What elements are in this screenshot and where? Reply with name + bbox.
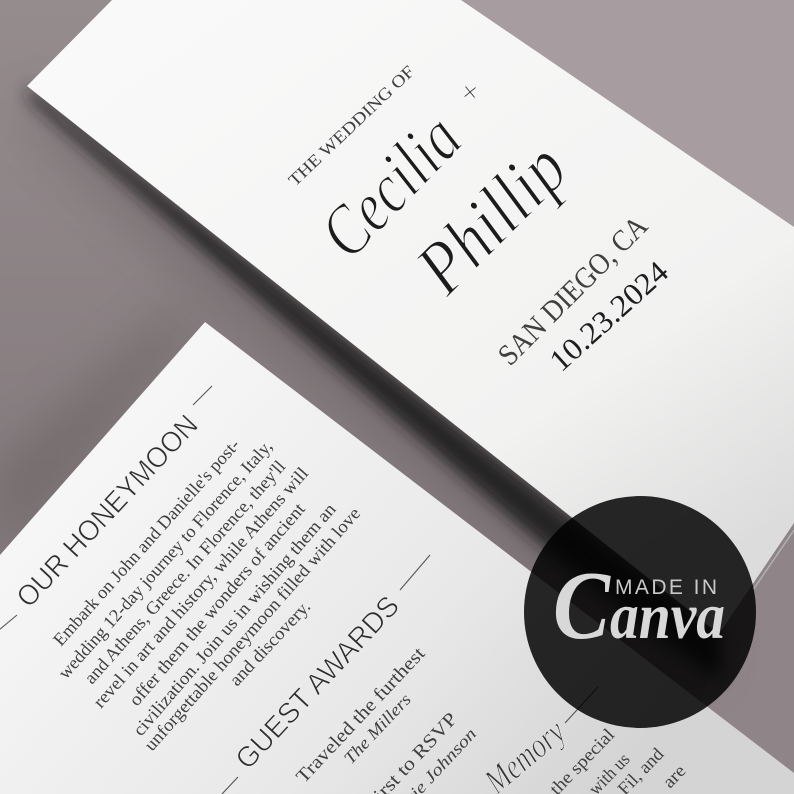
honeymoon heading: OUR HONEYMOON xyxy=(11,409,205,614)
honeymoon paragraph: and discovery. xyxy=(225,596,314,690)
awards left rule xyxy=(222,777,238,794)
lower right surface xyxy=(700,523,794,780)
honeymoon section xyxy=(0,386,364,755)
honeymoon paragraph: unforgettable honeymoon filled with love xyxy=(140,503,364,755)
memory paragraph: are xyxy=(658,761,690,792)
honeymoon left rule xyxy=(0,615,17,630)
guest awards section xyxy=(222,555,480,794)
badge: made in: MADE IN xyxy=(615,576,717,599)
cover: the wedding of: THE WEDDING OF xyxy=(285,62,418,190)
memory rule xyxy=(565,687,598,723)
badge circle xyxy=(524,496,756,728)
awards heading: GUEST AWARDS xyxy=(230,590,406,776)
badge: Canva script: Canva xyxy=(553,552,725,660)
award one winner: The Millers xyxy=(340,690,415,768)
honeymoon paragraph: wedding 12-day journey to Florence, Italy, xyxy=(54,436,276,683)
honeymoon right rule xyxy=(193,386,212,405)
award one: Traveled the furthest xyxy=(292,643,430,787)
cover: date: 10.23.2024 xyxy=(542,253,675,378)
memory section xyxy=(476,687,690,794)
honeymoon paragraph: civilization. Join us in wishing them an xyxy=(129,499,340,740)
awards right rule xyxy=(400,555,430,590)
cover: Cecilia script: Cecilia xyxy=(304,98,477,273)
shadow left of lower card xyxy=(0,310,205,555)
badge: made in Canva xyxy=(524,496,756,728)
soft shadow below top card xyxy=(27,86,719,690)
page stack edge xyxy=(753,530,794,590)
honeymoon paragraph: offer them the wonders of ancient xyxy=(125,499,309,710)
honeymoon paragraph: and Athens, Greece. In Florence, they'll xyxy=(80,456,289,688)
hard shadow below top card xyxy=(27,86,720,680)
memory paragraph xyxy=(545,724,690,794)
honeymoon paragraph: revel in art and history, while Athens will xyxy=(89,463,312,712)
cover: location: SAN DIEGO, CA xyxy=(492,209,654,372)
top card paper xyxy=(27,0,794,634)
cover text group xyxy=(285,62,675,378)
lower card paper xyxy=(0,322,794,794)
honeymoon paragraph xyxy=(49,435,364,755)
cover: plus sign: + xyxy=(451,72,488,111)
honeymoon paragraph: Embark on John and Danielle's post- xyxy=(49,435,244,650)
upper right lighter surface xyxy=(461,0,794,227)
cover: Phillip script: Phillip xyxy=(399,126,583,311)
